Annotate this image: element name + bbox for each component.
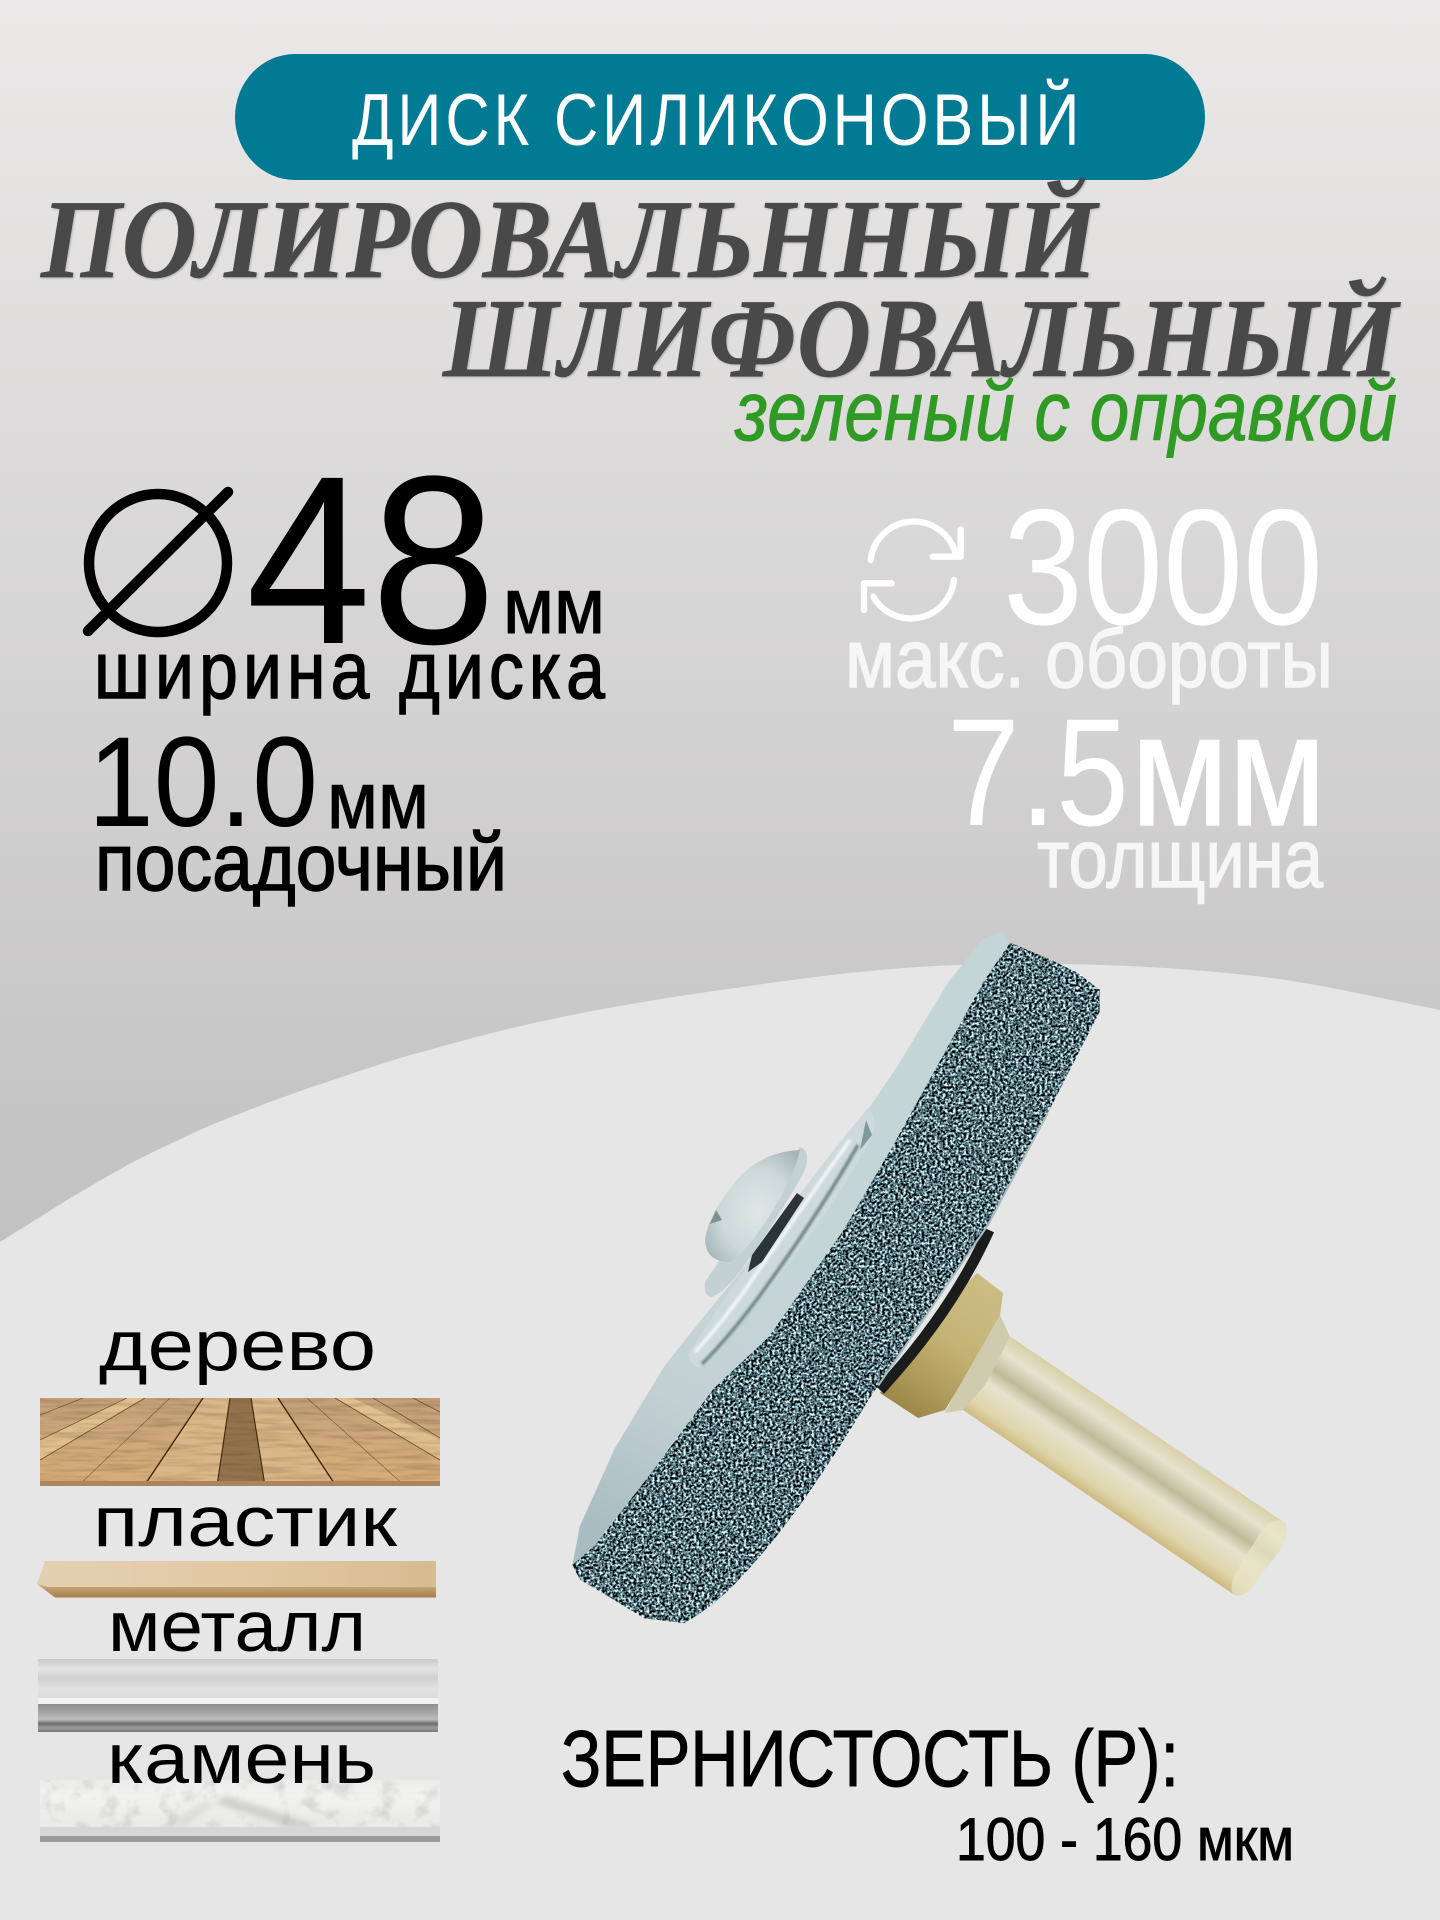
grit heading: ЗЕРНИСТОСТЬ (Р):: ЗЕРНИСТОСТЬ (Р): bbox=[561, 1714, 1179, 1803]
title pill: ДИСК СИЛИКОНОВЫЙ bbox=[235, 54, 1205, 180]
shaft end highlight bbox=[1232, 1520, 1287, 1595]
grit value: 100 - 160 мкм: 100 - 160 мкм bbox=[956, 1806, 1294, 1873]
label: толщина: толщина bbox=[1037, 812, 1324, 905]
material: металл: металл bbox=[108, 1588, 366, 1667]
spec: bore 10.0 mm: 10.0 bbox=[88, 711, 318, 854]
material: дерево: дерево bbox=[99, 1307, 376, 1386]
rivet dome bbox=[705, 1150, 800, 1262]
center dark plank bbox=[217, 1398, 265, 1486]
material: пластик: пластик bbox=[93, 1483, 398, 1562]
background lower curved panel bbox=[0, 964, 1440, 1920]
label: макс. обороты: макс. обороты bbox=[845, 612, 1333, 705]
material: камень: камень bbox=[107, 1720, 376, 1799]
spec: thickness 7.5 mm bbox=[947, 680, 1326, 859]
label: ширина диска: ширина диска bbox=[94, 626, 605, 716]
rim lower edge highlight bbox=[878, 1114, 1048, 1385]
title pill: ДИСК СИЛИКОНОВЫЙ: ДИСК СИЛИКОНОВЫЙ bbox=[352, 79, 1079, 161]
rubber washer bbox=[880, 1230, 989, 1390]
spec: disc diameter 48 mm bbox=[88, 426, 605, 694]
spec: thickness 7.5 mm: 7.5 bbox=[947, 687, 1129, 858]
icon: rotation arrows bbox=[864, 522, 961, 618]
spec: max speed 3000: 3000 bbox=[1003, 475, 1323, 659]
light planks bbox=[40, 1398, 145, 1460]
shaft flare bbox=[945, 1293, 1010, 1413]
product photo: silicone disc on mandrel bbox=[572, 932, 1287, 1623]
spec: disc diameter 48 mm: мм bbox=[503, 561, 605, 650]
rivet bbox=[705, 1147, 807, 1297]
wood swatch bbox=[40, 1398, 440, 1486]
label: посадочный: посадочный bbox=[95, 818, 507, 908]
spec: bore 10.0 mm: мм bbox=[327, 756, 429, 846]
rivet dark gap bbox=[748, 1193, 804, 1272]
disc face bbox=[572, 932, 1010, 1565]
plastic swatch bbox=[37, 1561, 436, 1598]
heading: ПОЛИРОВАЛЬННЫЙ: ПОЛИРОВАЛЬННЫЙ bbox=[40, 177, 1100, 302]
rivet dome speck bbox=[710, 1210, 722, 1224]
brass collar bbox=[880, 1273, 1003, 1418]
rivet washer bbox=[705, 1147, 807, 1297]
shaft bbox=[940, 1320, 1287, 1595]
metal swatch bbox=[38, 1659, 438, 1732]
spec: thickness 7.5 mm: мм bbox=[1131, 680, 1326, 859]
icon: diameter symbol bbox=[88, 492, 228, 632]
disc abrasive rim bbox=[572, 943, 1100, 1623]
large washer bbox=[688, 1108, 875, 1368]
stone swatch bbox=[40, 1780, 440, 1842]
spec: disc diameter 48 mm: 48 bbox=[246, 426, 496, 694]
